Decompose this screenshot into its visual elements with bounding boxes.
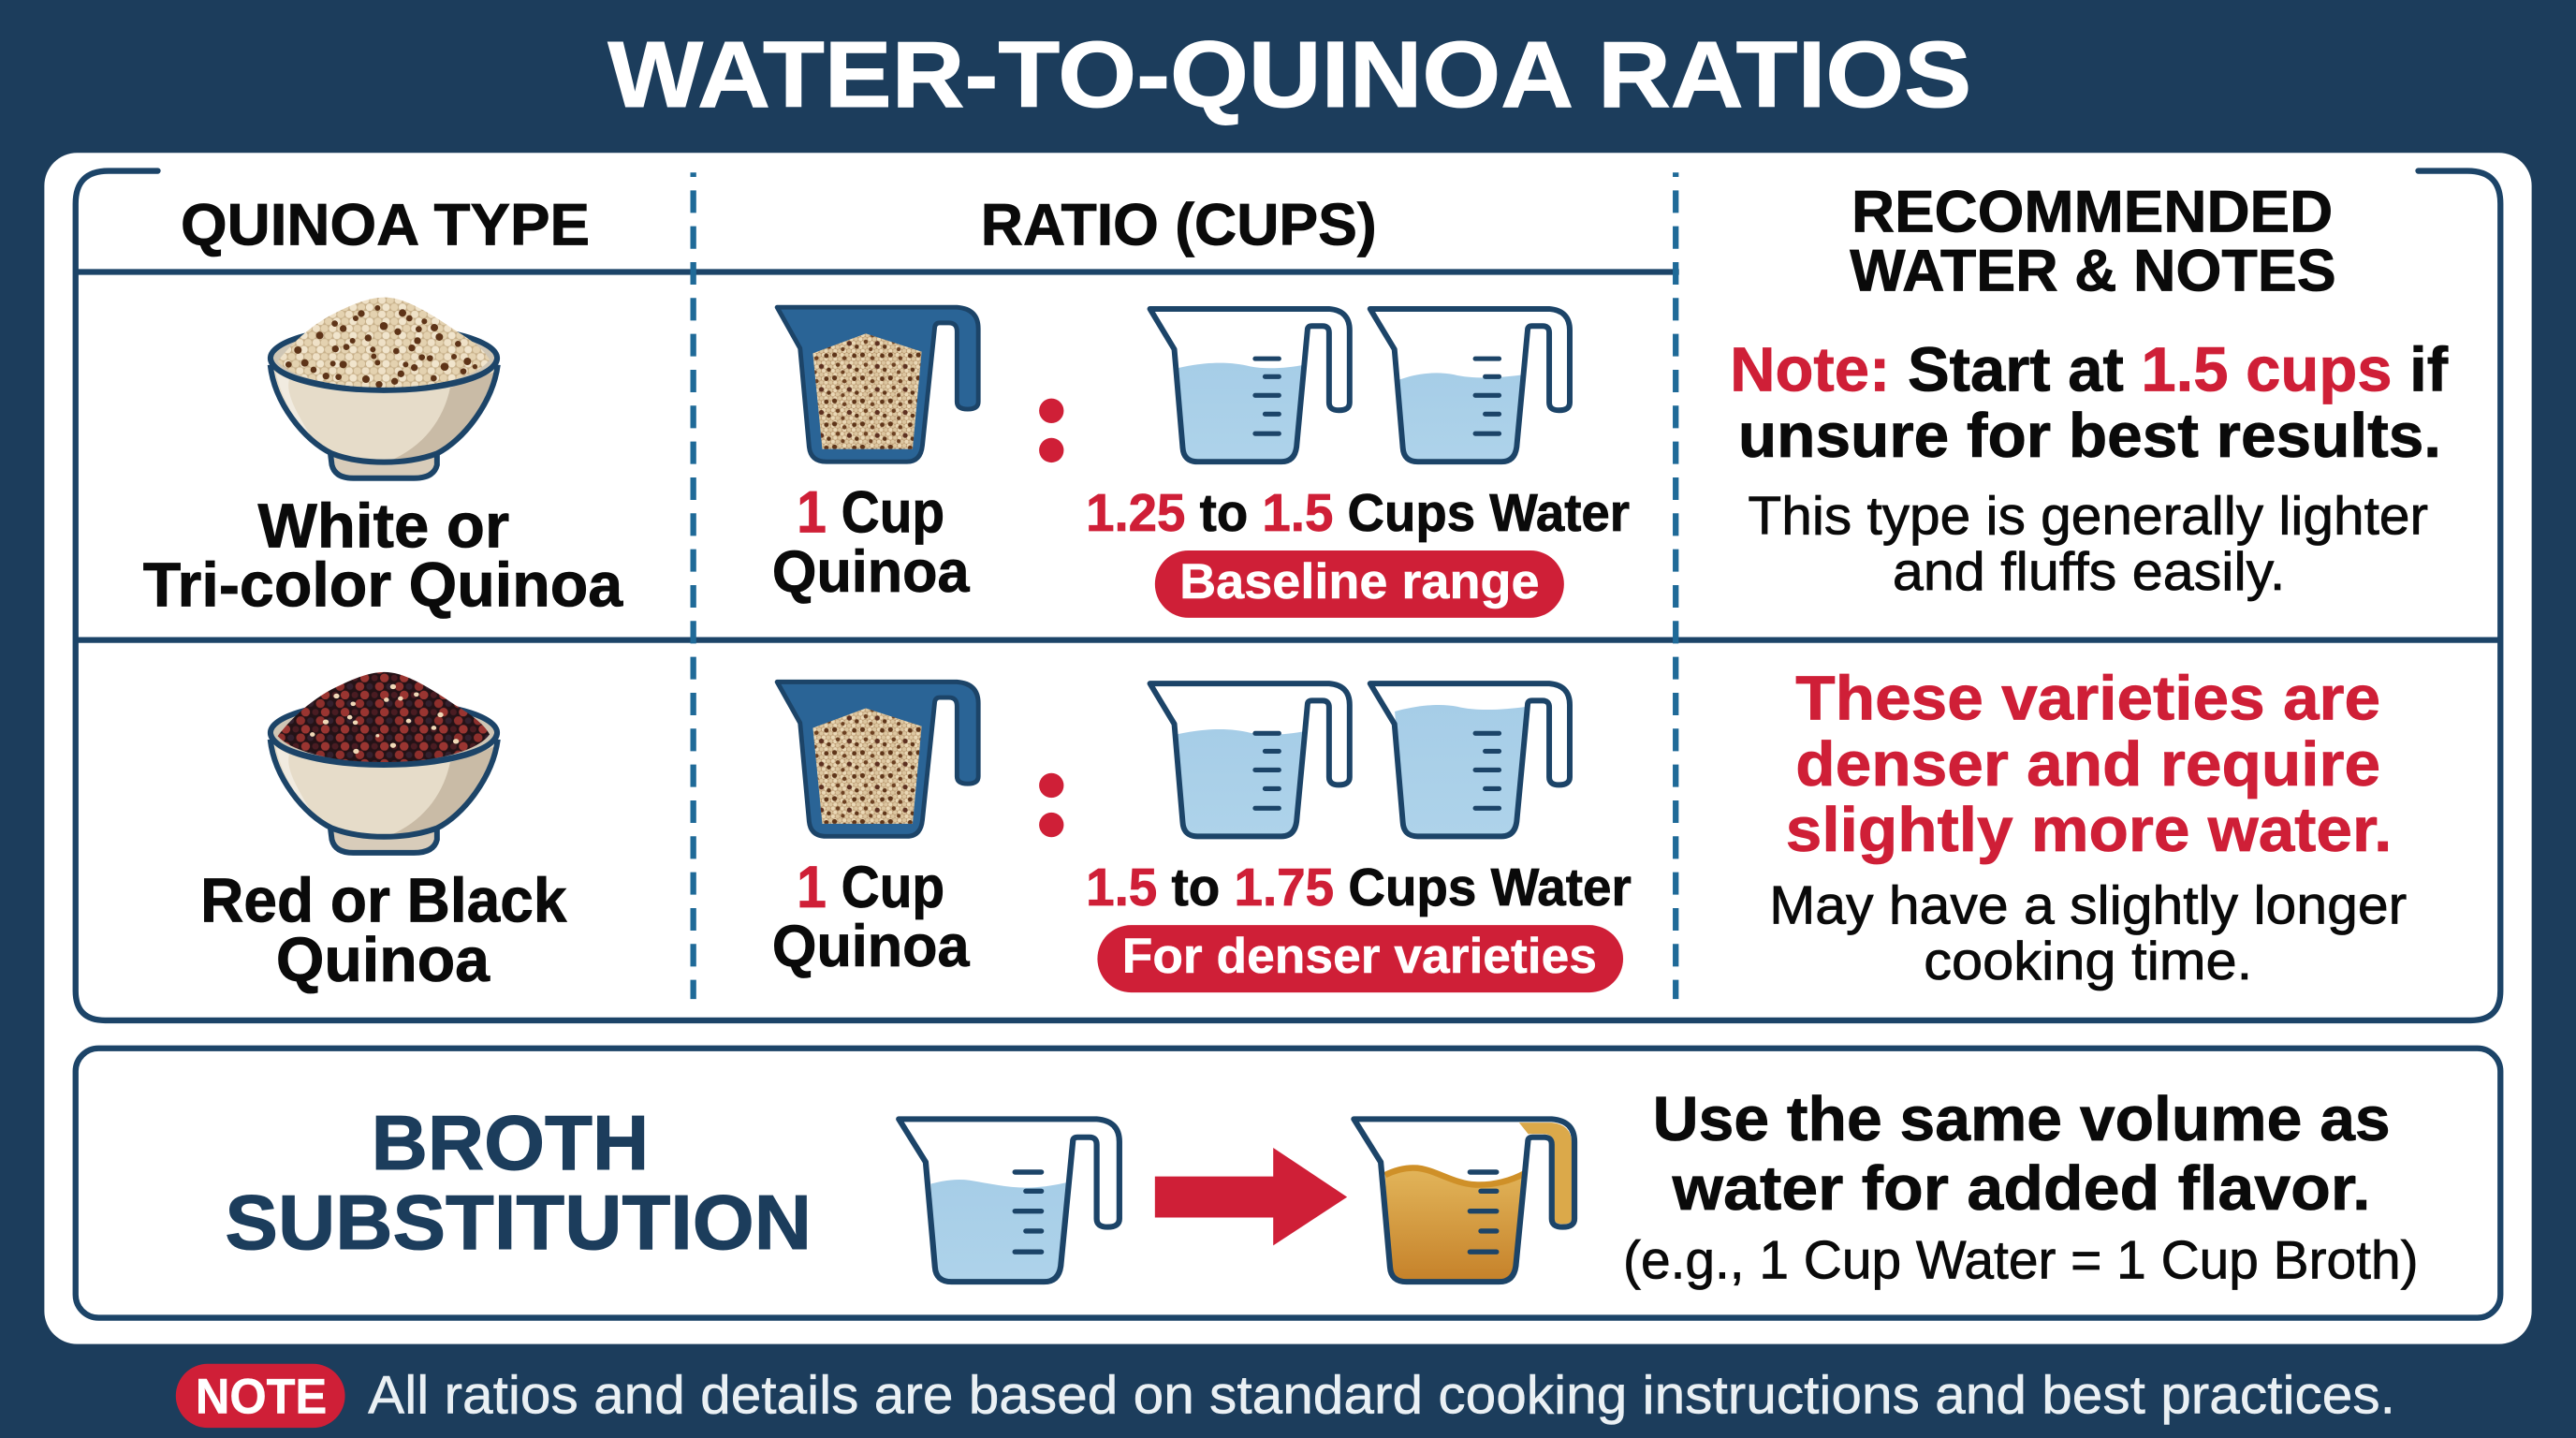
table rules xyxy=(76,271,2500,640)
title: WATER-TO-QUINOA RATIOS xyxy=(607,22,1971,127)
heading: quinoa type: QUINOA TYPE xyxy=(181,193,590,258)
note detail: cooking time. xyxy=(1924,932,2252,991)
icon: water cup one xyxy=(1150,309,1350,462)
heading: ratio: RATIO (CUPS) xyxy=(981,193,1377,258)
label: red or black quinoa: Red or Black xyxy=(200,867,567,936)
label: red or black quinoa xyxy=(200,867,567,995)
panel: broth substitution xyxy=(76,1049,2500,1318)
broth panel frame xyxy=(76,1049,2500,1318)
note: start at 1.5 cups: unsure for best results. xyxy=(1738,402,2441,471)
icon: water cup xyxy=(899,1119,1120,1282)
badge: note: NOTE xyxy=(196,1369,327,1424)
icon: cup of quinoa xyxy=(777,307,978,462)
panel: ratio table xyxy=(76,171,2500,1020)
note detail: This type is generally lighter xyxy=(1748,486,2428,546)
row 2: red or black xyxy=(200,665,2407,995)
heading: broth substitution: BROTH xyxy=(372,1100,649,1186)
note detail: and fluffs easily. xyxy=(1893,542,2285,602)
note detail xyxy=(1748,486,2428,602)
footer note xyxy=(176,1364,2395,1428)
heading: recommended water and notes: WATER & NOTES xyxy=(1850,239,2336,304)
note: denser varieties: slightly more water. xyxy=(1786,796,2392,865)
footer text: All ratios and details are based on standard cooking instructions and best practices. xyxy=(368,1365,2395,1425)
note: denser varieties: These varieties are xyxy=(1795,665,2380,734)
ratio colon xyxy=(1039,399,1063,462)
note: start at 1.5 cups: Note: Start at 1.5 cups if xyxy=(1730,336,2449,405)
label: 1 cup quinoa: Quinoa xyxy=(772,914,970,979)
note detail: May have a slightly longer xyxy=(1769,875,2407,935)
note detail xyxy=(1769,875,2407,991)
heading: recommended water and notes: RECOMMENDED xyxy=(1852,179,2333,244)
icon: water cup one xyxy=(1150,683,1350,836)
heading: broth substitution xyxy=(225,1100,812,1266)
label: 1 cup quinoa xyxy=(772,480,970,605)
heading: broth substitution: SUBSTITUTION xyxy=(225,1180,812,1266)
water amount: 1.5 to 1.75 Cups Water xyxy=(1086,858,1632,917)
column dividers xyxy=(694,172,1676,999)
text: same volume as water: (e.g., 1 Cup Water = 1 Cup Broth) xyxy=(1623,1230,2419,1290)
label: 1 cup quinoa: 1 Cup xyxy=(797,855,944,920)
label: white or tri-color quinoa: White or xyxy=(258,492,509,561)
text: same volume as water: Use the same volume as xyxy=(1653,1085,2391,1154)
arrow xyxy=(1155,1148,1347,1245)
label: 1 cup quinoa: Quinoa xyxy=(772,539,970,605)
label: white or tri-color quinoa xyxy=(143,492,623,621)
label: white or tri-color quinoa: Tri-color Quinoa xyxy=(143,551,623,621)
label: red or black quinoa: Quinoa xyxy=(276,926,490,995)
text: same volume as water xyxy=(1623,1085,2419,1290)
text: same volume as water: water for added flavor. xyxy=(1672,1154,2371,1224)
icon: water cup two xyxy=(1370,683,1570,836)
label: 1 cup quinoa xyxy=(772,855,970,979)
heading: recommended water and notes xyxy=(1850,179,2336,304)
row 1: white or tri-color xyxy=(143,298,2449,621)
icon: bowl of red and black quinoa xyxy=(271,672,498,853)
icon: bowl of tri-color quinoa xyxy=(271,298,498,478)
table frame xyxy=(76,171,2500,1020)
note: start at 1.5 cups xyxy=(1730,336,2449,471)
badge: note xyxy=(176,1364,345,1428)
note: denser varieties xyxy=(1786,665,2392,865)
badge: for denser varieties: For denser varieties xyxy=(1122,929,1597,984)
icon: water cup two xyxy=(1370,309,1570,462)
label: 1 cup quinoa: 1 Cup xyxy=(797,480,944,546)
ratio colon xyxy=(1039,773,1063,837)
icon: broth cup xyxy=(1354,1119,1574,1282)
icon: cup of quinoa xyxy=(777,682,978,836)
badge: baseline range: Baseline range xyxy=(1179,554,1540,609)
note: denser varieties: denser and require xyxy=(1795,730,2380,800)
water amount: 1.25 to 1.5 Cups Water xyxy=(1086,483,1630,542)
panel: main white card xyxy=(44,153,2532,1344)
